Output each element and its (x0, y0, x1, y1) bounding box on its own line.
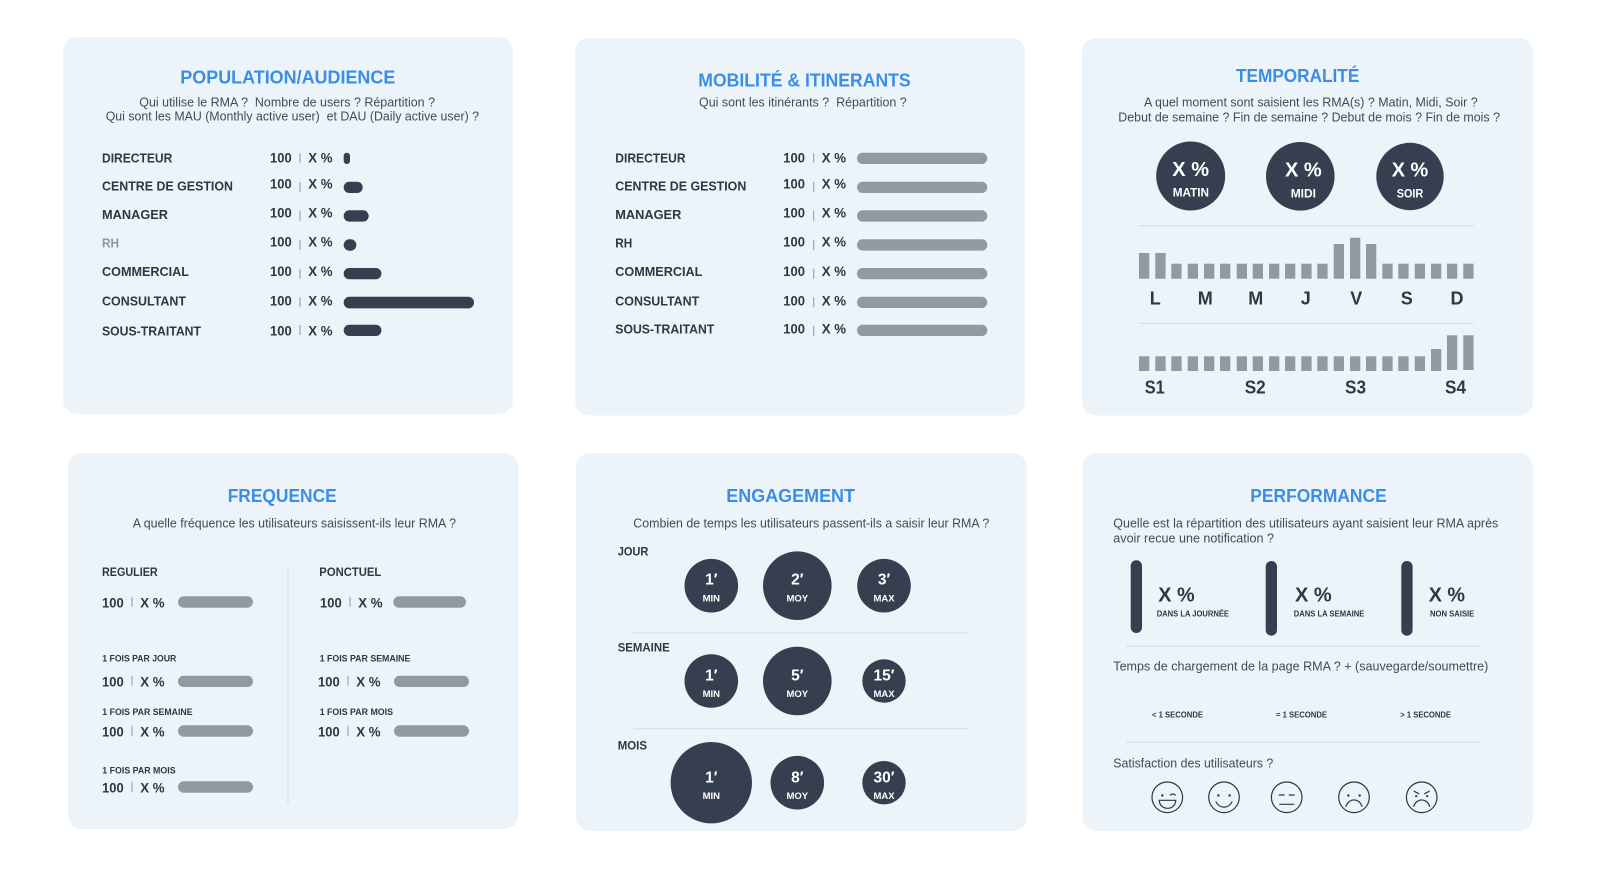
group: jour (618, 545, 911, 620)
column: ponctuel (318, 565, 469, 739)
group: mois: 1′ (705, 769, 718, 786)
text: performance question: avoir recue une notification ? (1113, 531, 1274, 546)
row: sous-traitant: X % (822, 321, 846, 336)
circle: soir (1376, 143, 1444, 210)
row: manager (615, 205, 987, 222)
row: ponctuel total: X % (358, 595, 383, 610)
row: 1 fois par semaine: 100 (318, 674, 340, 689)
row: 1 fois par semaine: 1 FOIS PAR SEMAINE (102, 707, 193, 718)
group: jour: MIN (703, 594, 720, 605)
row: 1 fois par semaine: 100 (102, 724, 124, 739)
row: manager: MANAGER (615, 207, 682, 222)
panel: temporalité (1082, 38, 1533, 416)
stat: dans la semaine: X % (1295, 585, 1332, 607)
circle: matin: MATIN (1173, 186, 1209, 200)
bar chart: weeks of the month: S3 (1345, 377, 1366, 397)
label: ponctuel: PONCTUEL (319, 565, 381, 579)
stat: dans la semaine: DANS LA SEMAINE (1294, 609, 1365, 618)
row: manager: 100 (783, 205, 805, 220)
row: consultant: 100 (270, 293, 292, 308)
text: mobility question: Qui sont les itinérants ? Répartition ? (699, 95, 907, 110)
row: rh: 100 (783, 234, 805, 249)
text: performance question: Quelle est la répartition des utilisateurs ayant saisient leur RMA après (1113, 515, 1499, 530)
group: mois: 30′ (874, 769, 895, 786)
heading: mobilité & itinérants: MOBILITÉ & ITINERANTS (698, 70, 911, 91)
stat: dans la journée (1131, 560, 1230, 633)
row: 1 fois par mois (318, 707, 469, 739)
bar chart: days of the week: D (1450, 288, 1464, 308)
row: rh: X % (822, 234, 846, 249)
row: 1 fois par semaine: 1 FOIS PAR SEMAINE (320, 654, 410, 665)
text: satisfaction question: Satisfaction des utilisateurs ? (1113, 755, 1273, 770)
text: timing question (1118, 95, 1500, 125)
group: mois: MOIS (618, 738, 647, 752)
row: commercial: 100 (783, 264, 805, 279)
row: 1 fois par jour: 1 FOIS PAR JOUR (102, 654, 176, 665)
text: timing question: A quel moment sont saisient les RMA(s) ? Matin, Midi, Soir ? (1144, 95, 1478, 110)
row: 1 fois par mois: 100 (318, 724, 340, 739)
row: 1 fois par semaine: X % (140, 724, 165, 739)
group: semaine: MIN (703, 689, 720, 700)
row: 1 fois par semaine: X % (356, 674, 381, 689)
row: centre de gestion: 100 (783, 176, 805, 191)
bar chart: weeks of the month (1139, 335, 1474, 397)
row: rh: RH (615, 236, 632, 251)
bar chart: weeks of the month: S1 (1145, 377, 1165, 397)
heading: frequence: FREQUENCE (228, 485, 337, 506)
group: mois: MAX (873, 791, 895, 802)
panel: engagement (576, 453, 1027, 831)
row: directeur: X % (308, 150, 333, 165)
stat: non saisie: NON SAISIE (1430, 609, 1475, 618)
row: commercial: COMMERCIAL (102, 264, 189, 279)
circle: midi: X % (1285, 160, 1322, 182)
panel: performance (1082, 453, 1533, 831)
row: rh (102, 234, 356, 251)
row: regulier total: X % (140, 595, 165, 610)
row: consultant (102, 293, 474, 308)
row: consultant: X % (308, 293, 333, 308)
bar chart: weeks of the month: S2 (1245, 377, 1266, 397)
stat: non saisie: X % (1429, 585, 1465, 607)
row: 1 fois par semaine (318, 654, 469, 689)
row: sous-traitant (102, 324, 381, 339)
icon: very happy face (1152, 782, 1183, 813)
row: centre de gestion: CENTRE DE GESTION (615, 179, 746, 194)
row: rh (615, 234, 987, 251)
row: manager: X % (822, 205, 846, 220)
row: 1 fois par semaine (102, 707, 253, 739)
row: 1 fois par jour: 100 (102, 674, 124, 689)
circle: matin (1156, 142, 1225, 210)
group: jour: MAX (873, 594, 895, 605)
stat: dans la semaine (1266, 561, 1365, 636)
stat: dans la journée: DANS LA JOURNÉE (1157, 609, 1230, 618)
row: 1 fois par mois: 1 FOIS PAR MOIS (102, 766, 176, 777)
row: consultant: CONSULTANT (615, 293, 699, 308)
group: mois: 8′ (791, 769, 804, 786)
row: manager (102, 205, 369, 222)
row: commercial: X % (822, 264, 846, 279)
row: directeur: 100 (783, 150, 805, 165)
panel: frequence (68, 453, 518, 829)
row: directeur (615, 150, 987, 165)
group: jour: 3′ (878, 572, 890, 589)
row: regulier total (102, 595, 253, 610)
circle: soir: SOIR (1397, 187, 1424, 201)
group: semaine (618, 640, 906, 715)
panel: population/audience (63, 37, 513, 414)
stat: dans la journée: X % (1158, 585, 1195, 607)
row: sous-traitant: 100 (783, 321, 805, 336)
row: rh: 100 (270, 234, 292, 249)
row: sous-traitant (615, 321, 987, 336)
row: sous-traitant: 100 (270, 324, 292, 339)
row: centre de gestion: 100 (270, 176, 292, 191)
row: manager: X % (308, 205, 333, 220)
row: centre de gestion: CENTRE DE GESTION (102, 179, 233, 194)
column: regulier (102, 565, 253, 795)
row: manager: 100 (270, 205, 292, 220)
row: sous-traitant: SOUS-TRAITANT (615, 321, 714, 336)
text: population question: Qui utilise le RMA ? Nombre de users ? Répartition ? (139, 95, 435, 110)
icon: sad face (1339, 782, 1369, 813)
group: jour: MOY (786, 594, 809, 605)
row: directeur: 100 (270, 150, 292, 165)
circle: midi: MIDI (1291, 187, 1316, 201)
row: commercial: 100 (270, 264, 292, 279)
row: consultant (615, 293, 987, 308)
row: 1 fois par jour: X % (140, 674, 165, 689)
row: ponctuel total: 100 (320, 595, 342, 610)
row: manager: MANAGER (102, 207, 169, 222)
label: regulier: REGULIER (102, 565, 158, 579)
icon: happy face (1209, 782, 1239, 813)
bar chart: days of the week (1139, 238, 1474, 308)
group: jour: JOUR (618, 545, 649, 559)
row: directeur: X % (822, 150, 846, 165)
bar chart: days of the week: M (1198, 288, 1213, 308)
row: consultant: CONSULTANT (102, 293, 186, 308)
row: sous-traitant: X % (308, 324, 333, 339)
group: semaine: 5′ (791, 667, 804, 684)
group: semaine: SEMAINE (618, 640, 670, 654)
row: commercial: X % (308, 264, 333, 279)
icon: neutral face (1271, 782, 1302, 813)
group: semaine: 1′ (705, 667, 718, 684)
heading: population/audience: POPULATION/AUDIENCE (180, 66, 395, 87)
bar chart: days of the week: M (1248, 288, 1263, 308)
row: commercial: COMMERCIAL (615, 264, 702, 279)
icon: angry face (1406, 782, 1437, 813)
row: centre de gestion (102, 176, 363, 194)
bar chart: days of the week: J (1301, 288, 1311, 308)
bar chart: days of the week: L (1150, 288, 1161, 308)
circle: soir: X % (1392, 160, 1429, 182)
labels: load time (1152, 710, 1452, 719)
row: regulier total: 100 (102, 595, 124, 610)
group: mois (618, 738, 906, 823)
row: rh: X % (308, 234, 333, 249)
labels: load time: > 1 SECONDE (1400, 710, 1452, 719)
heading: performance: PERFORMANCE (1250, 485, 1387, 506)
row: directeur: DIRECTEUR (615, 150, 686, 165)
row: commercial (615, 264, 987, 279)
group: jour: 1′ (705, 572, 718, 589)
row: 1 fois par mois: X % (140, 780, 165, 795)
group: semaine: 15′ (874, 667, 895, 684)
text: timing question: Debut de semaine ? Fin de semaine ? Debut de mois ? Fin de mois ? (1118, 110, 1500, 125)
group: jour: 2′ (791, 572, 804, 589)
text: population question: Qui sont les MAU (Monthly active user) et DAU (Daily active user) ? (106, 109, 479, 124)
row: 1 fois par mois: X % (356, 724, 381, 739)
row: ponctuel total (320, 595, 466, 610)
row: sous-traitant: SOUS-TRAITANT (102, 324, 201, 339)
row: consultant: 100 (783, 293, 805, 308)
row: commercial (102, 264, 381, 279)
circle: matin: X % (1172, 159, 1209, 181)
group: mois: MIN (703, 791, 720, 802)
circle: midi (1266, 142, 1335, 211)
stat: non saisie (1401, 561, 1475, 636)
text: engagement question: Combien de temps les utilisateurs passent-ils a saisir leur RMA ? (633, 515, 989, 530)
text: load time question: Temps de chargement de la page RMA ? + (sauvegarde/soumettre) (1113, 659, 1488, 674)
row: rh: RH (102, 236, 119, 251)
row: centre de gestion (615, 176, 987, 194)
bar chart: days of the week: S (1401, 288, 1413, 308)
row: 1 fois par mois (102, 766, 253, 795)
row: centre de gestion: X % (822, 176, 846, 191)
row: centre de gestion: X % (308, 176, 333, 191)
bar chart: days of the week: V (1350, 288, 1362, 308)
text: population question (106, 95, 479, 124)
row: consultant: X % (822, 293, 846, 308)
group: semaine: MAX (873, 689, 895, 700)
labels: load time: < 1 SECONDE (1152, 710, 1204, 719)
text: frequency question: A quelle fréquence les utilisateurs saisissent-ils leur RMA ? (133, 515, 456, 530)
group: semaine: MOY (786, 689, 809, 700)
heading: engagement: ENGAGEMENT (726, 485, 856, 506)
panel: mobilité & itinérants (575, 38, 1025, 416)
heading: temporalité: TEMPORALITÉ (1236, 65, 1359, 86)
row: directeur (102, 150, 350, 165)
group: mois: MOY (786, 791, 809, 802)
labels: load time: = 1 SECONDE (1276, 710, 1328, 719)
row: 1 fois par jour (102, 654, 253, 689)
row: directeur: DIRECTEUR (102, 150, 173, 165)
text: performance question (1113, 515, 1499, 546)
row: 1 fois par mois: 100 (102, 780, 124, 795)
row: 1 fois par mois: 1 FOIS PAR MOIS (320, 707, 393, 718)
bar chart: weeks of the month: S4 (1445, 377, 1466, 397)
